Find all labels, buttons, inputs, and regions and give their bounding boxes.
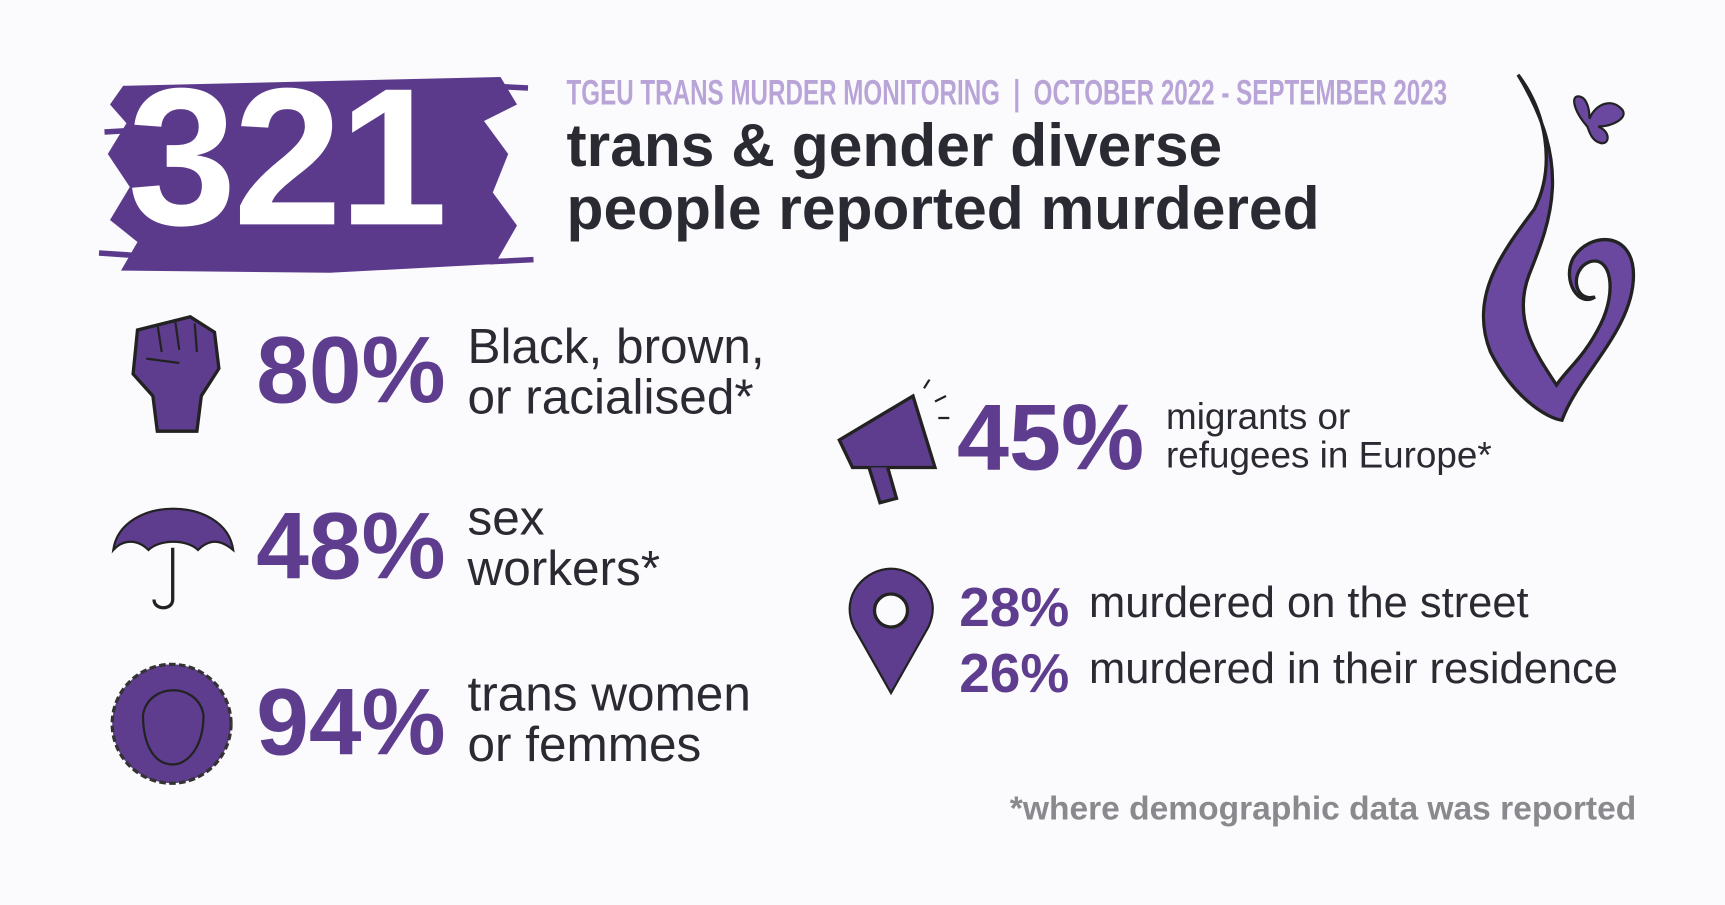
stat: 48% sex workers: sex — [468, 490, 545, 546]
stat: 28% / 26% locations — [848, 568, 1618, 704]
header line: TGEU TRANS MURDER MONITORING | OCTOBER 2022 - SEPTEMBER 2023 — [566, 73, 1447, 112]
stat: 48% sex workers: workers* — [468, 540, 660, 596]
stat: 48% sex workers: 48% — [256, 494, 446, 600]
stat: 28% / 26% locations: murdered on the street — [1089, 579, 1529, 627]
stat: 80% racialised — [131, 315, 765, 433]
big number 321: 321 — [128, 47, 444, 266]
title: trans & gender diverse — [566, 111, 1222, 179]
stat: 45% migrants: 45% — [957, 386, 1144, 491]
logo swirl — [1482, 74, 1636, 422]
stat: 28% / 26% locations: murdered in their residence — [1089, 645, 1618, 693]
stat: 94% trans women: or femmes — [468, 716, 701, 772]
stat: 48% sex workers — [112, 490, 660, 610]
footnote: *where demographic data was reported — [1010, 790, 1636, 827]
title: people reported murdered — [566, 174, 1320, 242]
title — [566, 111, 1320, 242]
stat: 80% racialised: Black, brown, — [468, 318, 765, 374]
stat: 28% / 26% locations: 28% — [959, 576, 1069, 638]
icon: map pin — [848, 568, 934, 696]
stat: 80% racialised: or racialised* — [468, 368, 754, 425]
stat: 45% migrants — [837, 380, 1492, 505]
stat: 45% migrants: refugees in Europe* — [1166, 436, 1492, 476]
stat: 80% racialised: 80% — [256, 318, 446, 424]
stat: 94% trans women: 94% — [256, 670, 446, 776]
icon: face — [110, 662, 233, 785]
stat: 94% trans women — [110, 662, 751, 785]
icon: fist — [131, 315, 221, 433]
stat: 28% / 26% locations: 26% — [959, 642, 1069, 704]
stat: 94% trans women: trans women — [468, 666, 751, 722]
icon: megaphone — [837, 380, 950, 505]
stat: 45% migrants: migrants or — [1166, 397, 1350, 438]
icon: umbrella — [112, 508, 235, 610]
